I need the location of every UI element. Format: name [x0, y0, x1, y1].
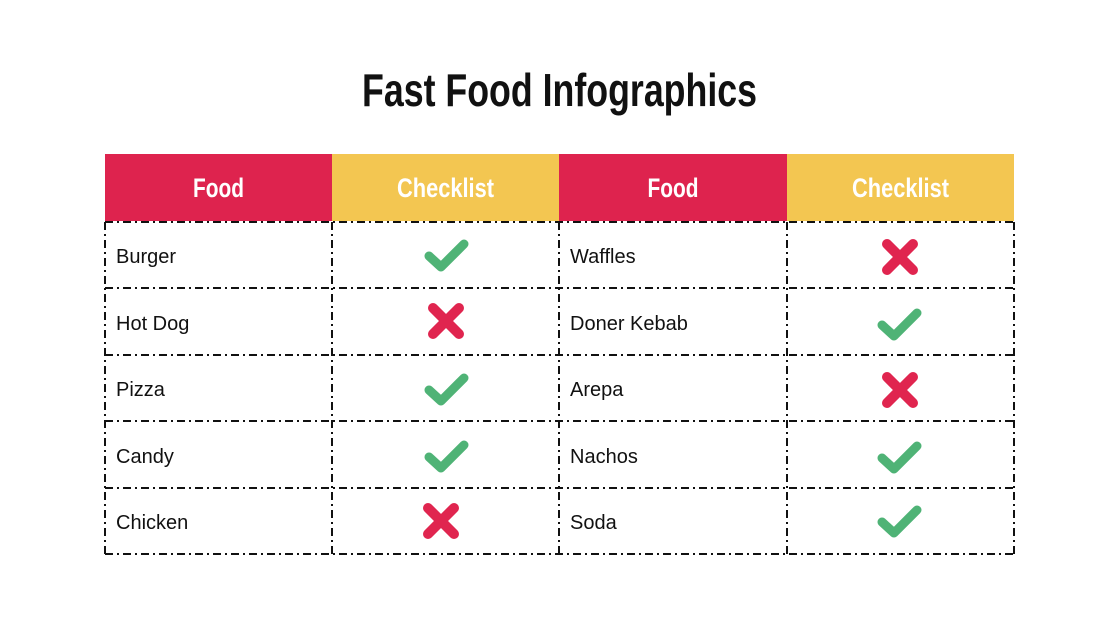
- food names: Soda: [570, 512, 618, 534]
- food names: Pizza: [116, 379, 166, 401]
- food names: Hot Dog: [116, 313, 189, 335]
- food names: Candy: [116, 446, 174, 468]
- food names: Waffles: [570, 246, 636, 268]
- food names: Nachos: [570, 446, 638, 468]
- table header: Checklist: [852, 173, 949, 203]
- table header: Food: [193, 173, 244, 203]
- table header: Checklist: [397, 173, 494, 203]
- table header: Food: [648, 173, 698, 203]
- checklist icons: [428, 244, 917, 534]
- food names: Arepa: [570, 379, 624, 401]
- title: Fast Food Infographics: [362, 64, 757, 116]
- food names: Doner Kebab: [570, 313, 688, 335]
- food names: [116, 246, 688, 534]
- table header: [105, 154, 1014, 221]
- table grid: [105, 222, 1014, 554]
- food names: Burger: [116, 246, 176, 268]
- food names: Chicken: [116, 512, 188, 534]
